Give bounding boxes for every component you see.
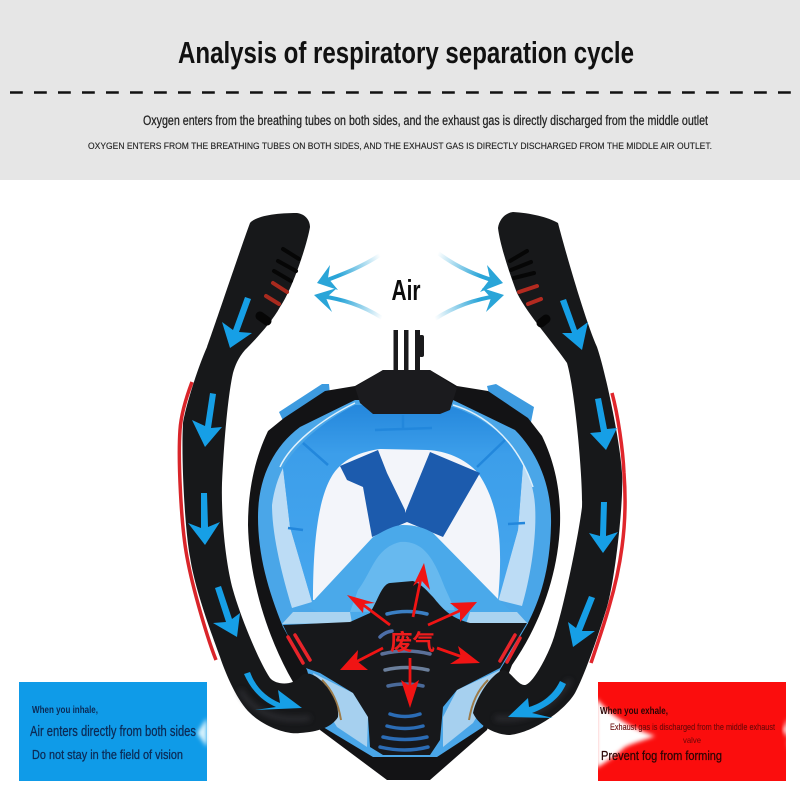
glass ledges: [282, 612, 528, 624]
red strip: [179, 382, 216, 660]
exhaust label: 废气: [390, 630, 435, 655]
exhale heading: When you exhale,: [600, 705, 668, 717]
air arrows right: [435, 253, 504, 319]
inhale panel: [19, 682, 207, 781]
flow arrows: [508, 299, 618, 718]
red strip: [591, 393, 625, 663]
exhale panel: [596, 682, 790, 781]
inhale line 2: Do not stay in the field of vision: [32, 748, 183, 762]
title: Analysis of respiratory separation cycle: [178, 36, 634, 70]
diving mask: [248, 330, 560, 780]
left breathing tube: [179, 213, 338, 733]
exhale line 3: Prevent fog from forming: [601, 748, 722, 763]
red exhaust arrows: [340, 563, 480, 708]
top bracket: [355, 370, 457, 414]
blue silicone band: [283, 405, 523, 602]
header band: [0, 0, 800, 180]
blue rim: [258, 400, 551, 757]
tube highlights: [240, 690, 310, 719]
mask shell: [248, 370, 560, 780]
clear window: [313, 449, 500, 600]
air arrows left: [314, 255, 382, 318]
head strap: [340, 450, 480, 537]
right breathing tube: [473, 212, 625, 735]
vents: [260, 249, 299, 321]
red side vents: [288, 635, 520, 663]
blue corner tabs: [279, 384, 534, 425]
vent slots: [380, 612, 430, 750]
inhale line 1: Air enters directly from both sides: [30, 724, 196, 740]
inhale heading: When you inhale,: [32, 704, 98, 716]
carbon mouth cover: [283, 581, 527, 755]
air label: Air: [392, 275, 420, 307]
lower clear glass: [313, 670, 500, 747]
camera mount: [394, 330, 424, 372]
pale glass sides: [272, 465, 535, 608]
exhale line 2: valve: [683, 735, 701, 745]
vents: [510, 251, 546, 323]
valve connectors: [322, 680, 488, 720]
tube highlights: [495, 680, 570, 719]
flow arrows: [188, 297, 302, 710]
description in capitals: OXYGEN ENTERS FROM THE BREATHING TUBES ON BOTH SIDES, AND THE EXHAUST GAS IS DIRECTLY DISCHARGED FROM THE MIDDLE AIR OUTLET.: [88, 141, 712, 151]
nose piece: [308, 525, 512, 625]
